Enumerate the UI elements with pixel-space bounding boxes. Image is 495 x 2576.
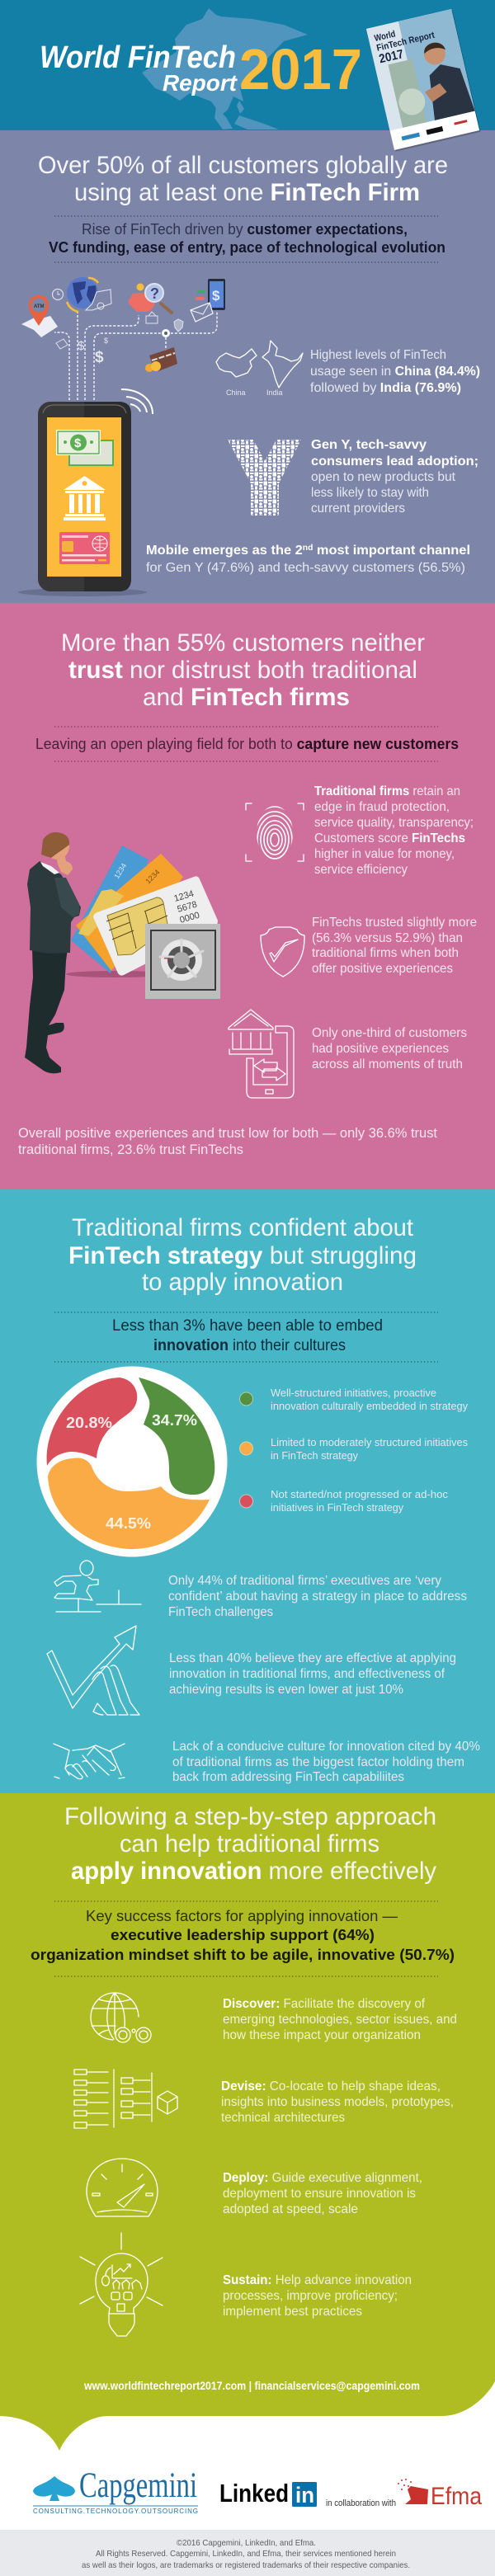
icon: hurdler — [54, 1561, 141, 1612]
text: Discover: Discover: Facilitate the discovery of — [223, 1997, 426, 2011]
text: mobile channel: most important channel — [313, 544, 470, 558]
payment card — [59, 532, 110, 564]
report cover: World — [374, 29, 397, 44]
text: culture — [172, 1740, 480, 1784]
text: Deploy — [223, 2171, 422, 2216]
panel: customers using FinTech — [0, 9, 495, 603]
dashed connection lines — [54, 311, 217, 400]
logo: Capgemini — [33, 2466, 198, 2515]
banknotes — [56, 430, 113, 465]
subheading: VC funding, ease of entry, pace of technological evolution — [49, 239, 446, 256]
heading — [61, 629, 425, 711]
text: Sustain: Sustain: Help advance innovation — [223, 2273, 412, 2287]
legend: innovation culturally embedded in strategy — [271, 1400, 468, 1412]
icon: China and India maps — [216, 341, 303, 397]
text: highest usage: usage seen in China (84.4%) — [310, 365, 480, 379]
donut chart — [36, 1366, 228, 1557]
text: culture: back from addressing FinTech capabiliites — [172, 1770, 404, 1784]
heading: FinTech strategy but struggling — [68, 1242, 417, 1269]
heading: to apply innovation — [142, 1269, 343, 1296]
text: Sustain: implement best practices — [223, 2305, 362, 2319]
logo: Capgemini: CONSULTING.TECHNOLOGY.OUTSOURCING — [33, 2508, 198, 2515]
text: mobile channel — [146, 544, 470, 575]
text: effectiveness: Less than 40% believe they are effective at applying — [169, 1651, 456, 1665]
donut chart: 34.7% — [152, 1412, 197, 1429]
heading: apply innovation more effectively — [71, 1858, 436, 1885]
panel: step-by-step approach — [0, 1793, 495, 2451]
icon: credit card and coins — [145, 347, 177, 372]
icon: dollar signs: $ — [78, 339, 85, 353]
icon: ATM map pin — [21, 295, 58, 337]
icon: architecture diagram — [74, 2070, 177, 2128]
text: FinTechs trusted: FinTechs trusted slightly more — [312, 916, 477, 930]
heading — [64, 1803, 436, 1885]
legend: Not started/not progressed or ad-hoc — [271, 1488, 449, 1500]
text: Deploy: adopted at speed, scale — [223, 2202, 358, 2216]
subheading — [49, 221, 446, 256]
text: one-third of customers: Only one-third of customers — [312, 1026, 467, 1040]
report cover: 2017 — [378, 47, 405, 66]
text: highest usage: followed by India (76.9%) — [310, 381, 461, 395]
text: one-third of customers: across all moments of truth — [312, 1057, 463, 1071]
heading — [38, 152, 448, 206]
heading: More than 55% customers neither — [61, 629, 425, 657]
text: traditional firms: edge in fraud protection, — [314, 800, 450, 814]
text: Sustain: processes, improve proficiency; — [223, 2289, 398, 2303]
icon: dollar signs: $ — [104, 337, 108, 345]
icon: dollar signs: $ — [95, 349, 104, 366]
text: very confident — [168, 1574, 467, 1619]
text: FinTechs trusted: traditional firms when both — [312, 946, 459, 960]
illustration: cards and safe — [66, 845, 220, 999]
map of Asia — [142, 8, 308, 130]
text: Gen Y: consumers lead adoption; — [311, 454, 478, 469]
text: Devise: insights into business models, prototypes, — [221, 2095, 454, 2109]
icon: shield with check — [261, 927, 304, 977]
donut chart: 44.5% — [106, 1515, 151, 1532]
illustration: cards and safe: 1234 — [112, 862, 128, 880]
text: traditional firms: higher in value for money, — [314, 847, 455, 861]
icon: globe with binoculars — [91, 1993, 151, 2042]
text: one-third of customers: had positive experiences — [312, 1042, 449, 1056]
footer — [0, 2530, 495, 2576]
icon: Y made of small icons — [228, 440, 301, 516]
icon: speed gauge — [87, 2159, 158, 2216]
legend: initiatives in FinTech strategy — [271, 1501, 403, 1514]
illustration: cards and safe: 0000 — [179, 911, 200, 925]
text: Discover: how these impact your organization — [223, 2028, 421, 2042]
text: very confident: FinTech challenges — [168, 1605, 273, 1619]
heading: can help traditional firms — [120, 1830, 380, 1858]
footer: All Rights Reserved. Capgemini, LinkedIn, and Efma, their services mentioned herein — [96, 2549, 396, 2559]
text: very confident: Only 44% of traditional firms’ executives are ‘very — [168, 1574, 441, 1588]
legend: in FinTech strategy — [271, 1449, 358, 1462]
icon: ATM map pin: ATM — [34, 304, 45, 309]
logo: Efma — [398, 2479, 482, 2510]
subheading: organization mindset shift to be agile, innovative (50.7%) — [31, 1947, 455, 1963]
text: FinTechs trusted: offer positive experiences — [312, 962, 453, 976]
bank building — [64, 476, 106, 520]
icon: fingerprint — [245, 803, 304, 862]
icon: light bulb with team — [80, 2233, 163, 2336]
text: Gen Y: current providers — [311, 502, 405, 516]
text: highest usage — [310, 348, 480, 395]
text: Deploy: deployment to ensure innovation is — [223, 2187, 416, 2201]
subheading: Key success factors for applying innovation — — [86, 1908, 398, 1924]
text: Gen Y — [311, 438, 478, 516]
icon: China and India maps: India — [266, 389, 283, 397]
text: highest usage: Highest levels of FinTech — [310, 348, 446, 362]
text: overall trust low: Overall positive experiences and trust low for both — only 36.6% trust — [18, 1125, 437, 1141]
subheading — [31, 1908, 455, 1963]
text: FinTechs trusted — [312, 916, 477, 976]
text: overall trust low — [18, 1125, 437, 1157]
footer: ©2016 Capgemini, LinkedIn, and Efma. — [177, 2538, 316, 2548]
icon: piggy bank and magnifier: ? — [150, 285, 159, 302]
subheading: Rise of FinTech driven by customer expectations, — [82, 221, 408, 238]
text: very confident: confident’ about having a strategy in place to address — [168, 1589, 467, 1604]
text: effectiveness: innovation in traditional firms, and effectiveness of — [169, 1667, 446, 1681]
text: culture: Lack of a conducive culture for innovation cited by 40% — [172, 1740, 480, 1754]
icon: dollar signs — [78, 337, 108, 366]
heading: trust nor distrust both traditional — [68, 657, 417, 684]
heading: Following a step-by-step approach — [64, 1803, 436, 1830]
illustration: cards and safe: 5678 — [177, 900, 198, 915]
illustration: cards and safe: 1234 — [144, 868, 162, 885]
icon: smartphone with dollar: $ — [212, 288, 220, 304]
logo: LinkedIn: Linked — [219, 2479, 289, 2508]
text: Gen Y: open to new products but — [311, 470, 456, 484]
text: mobile channel: Mobile emerges as the 2 — [146, 544, 299, 558]
text: effectiveness — [169, 1651, 456, 1697]
text: Sustain — [223, 2273, 412, 2319]
icon: rising check arrow — [47, 1626, 139, 1715]
text: mobile channel: for Gen Y (47.6%) and tech-savvy customers (56.5%) — [146, 561, 465, 575]
title: 2017 — [239, 37, 362, 101]
heading: Traditional firms confident about — [72, 1214, 414, 1241]
heading: using at least one FinTech Firm — [74, 179, 420, 206]
text: FinTechs trusted: (56.3% versus 52.9%) than — [312, 931, 463, 945]
report cover — [366, 9, 481, 152]
logo: LinkedIn: in — [295, 2483, 314, 2508]
subheading: Less than 3% have been able to embed — [112, 1317, 383, 1335]
heading — [68, 1214, 417, 1296]
icon: smartphone — [18, 402, 147, 596]
subheading — [112, 1317, 383, 1354]
subheading: Leaving an open playing field for both to capture new customers — [35, 736, 459, 752]
legend — [239, 1387, 468, 1514]
text: Gen Y: Gen Y, tech-savvy — [311, 438, 427, 452]
text: traditional firms — [314, 784, 474, 877]
text: culture: of traditional firms as the biggest factor holding them — [172, 1755, 464, 1769]
icon: globe — [53, 277, 111, 312]
panel: trust — [0, 603, 495, 1189]
subheading: executive leadership support (64%) — [111, 1927, 375, 1943]
panel: strategy — [0, 1189, 495, 1793]
title: Report — [163, 70, 238, 96]
heading: and FinTech firms — [143, 684, 350, 711]
illustration: cards and safe: 1234 — [173, 889, 195, 904]
subheading: innovation into their cultures — [153, 1337, 346, 1354]
panel: header — [0, 0, 495, 130]
text: Gen Y: less likely to stay with — [311, 486, 429, 500]
text: traditional firms: Traditional firms retain an — [314, 784, 460, 798]
icon: small fintech glyphs — [56, 312, 183, 349]
icon: China and India maps: China — [226, 389, 246, 397]
icon: wifi signal — [121, 389, 153, 414]
logo: Capgemini: Capgemini — [79, 2466, 197, 2505]
legend: Limited to moderately structured initiatives — [271, 1436, 468, 1448]
text: traditional firms: service quality, transparency; — [314, 816, 474, 830]
illustration: thoughtful businessman — [25, 832, 81, 1073]
text: traditional firms: Customers score FinTechs — [314, 831, 465, 845]
text: Discover: emerging technologies, sector issues, and — [223, 2013, 457, 2027]
collaboration note: in collaboration with — [326, 2498, 396, 2508]
text: Devise — [221, 2079, 454, 2125]
text: traditional firms: service efficiency — [314, 863, 408, 877]
icon: handshake — [54, 1744, 125, 1779]
logo: Efma: Efma — [431, 2483, 482, 2510]
text: mobile channel: nd — [303, 544, 313, 553]
report cover: FinTech Report — [375, 31, 436, 54]
donut chart: 20.8% — [66, 1415, 112, 1431]
icon: smartphone with dollar — [191, 279, 225, 322]
footer: as well as their logos, are trademarks or registered trademarks of their respective companies. — [82, 2560, 410, 2570]
text: one-third of customers — [312, 1026, 467, 1071]
text: Devise: Devise: Co-locate to help shape ideas, — [221, 2079, 441, 2093]
title — [40, 37, 362, 101]
text: Devise: technical architectures — [221, 2111, 345, 2125]
banknotes: $ — [74, 436, 82, 450]
text: Discover — [223, 1997, 457, 2042]
icon: bank and mobile — [229, 1010, 294, 1098]
legend: Well-structured initiatives, proactive — [271, 1387, 436, 1399]
title: World FinTech — [40, 40, 236, 75]
contact line: www.worldfintechreport2017.com | financialservices@capgemini.com — [83, 2380, 420, 2392]
text: Deploy: Deploy: Guide executive alignment, — [223, 2171, 422, 2185]
text: overall trust low: traditional firms, 23.6% trust FinTechs — [18, 1142, 243, 1157]
icon: piggy bank and magnifier — [128, 284, 172, 313]
text: effectiveness: achieving results is even lower at just 10% — [169, 1683, 403, 1697]
heading: Over 50% of all customers globally are — [38, 152, 448, 179]
